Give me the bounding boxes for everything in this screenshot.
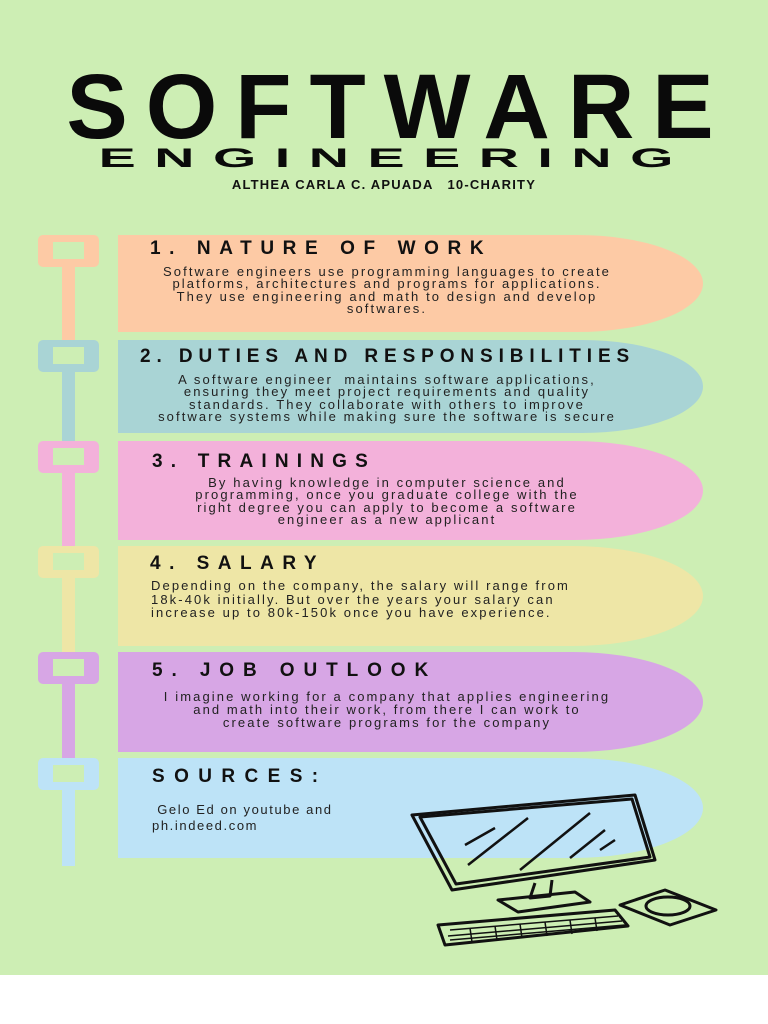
panel: sources: ph.indeed.com <box>152 818 258 832</box>
panel: duties: ensuring they meet project requirements and quality <box>184 384 590 399</box>
panel: duties <box>118 340 703 433</box>
panel: trainings <box>118 441 703 540</box>
panel: duties: 2. DUTIES AND RESPONSIBILITIES <box>140 346 635 367</box>
panel: duties: A software engineer maintains software applications, <box>178 372 596 387</box>
panel: nature of work <box>118 235 703 332</box>
panel: duties: software systems while making sure the software is secure <box>158 409 616 424</box>
panel: job outlook: and math into their work, from there I can work to <box>193 702 581 717</box>
panel: nature of work: 1. NATURE OF WORK <box>150 238 492 259</box>
panel: trainings: 3. TRAININGS <box>152 451 376 472</box>
panel: sources <box>118 758 703 858</box>
subtitle: engineering: ENGINEERING <box>99 143 692 173</box>
panel: salary: 18k-40k initially. But over the years your salary can <box>151 592 555 606</box>
panel: nature of work: platforms, architectures and programs for applications. <box>172 276 602 291</box>
panel: salary: 4. SALARY <box>150 553 325 574</box>
panel: nature of work: softwares. <box>347 301 427 316</box>
panel: trainings: engineer as a new applicant <box>278 512 496 527</box>
panel: sources: Gelo Ed on youtube and <box>157 802 333 817</box>
panel: nature of work: They use engineering and math to design and develop <box>177 289 597 304</box>
panel: job outlook: I imagine working for a company that applies engineering <box>164 689 610 704</box>
panel: trainings: programming, once you graduate college with the <box>195 487 579 502</box>
panel: job outlook: 5. JOB OUTLOOK <box>152 660 437 681</box>
panel: job outlook: create software programs for the company <box>223 715 551 730</box>
panel: trainings: By having knowledge in computer science and <box>208 475 566 490</box>
panel: salary: Depending on the company, the salary will range from <box>151 578 570 593</box>
panel: nature of work: Software engineers use programming languages to create <box>163 264 611 279</box>
title: SOFTWARE <box>66 56 732 158</box>
panel: salary: increase up to 80k-150k once you have experience. <box>151 605 552 620</box>
icon: computer <box>410 794 718 946</box>
panel: trainings: right degree you can apply to become a software <box>197 500 577 515</box>
panel: job outlook <box>118 652 703 752</box>
author line: ALTHEA CARLA C. APUADA 10-CHARITY <box>232 177 536 192</box>
timeline icons <box>38 235 99 866</box>
panel: salary <box>118 546 703 646</box>
panel: duties: standards. They collaborate with others to improve <box>189 397 585 412</box>
panel: sources: SOURCES: <box>152 766 328 787</box>
